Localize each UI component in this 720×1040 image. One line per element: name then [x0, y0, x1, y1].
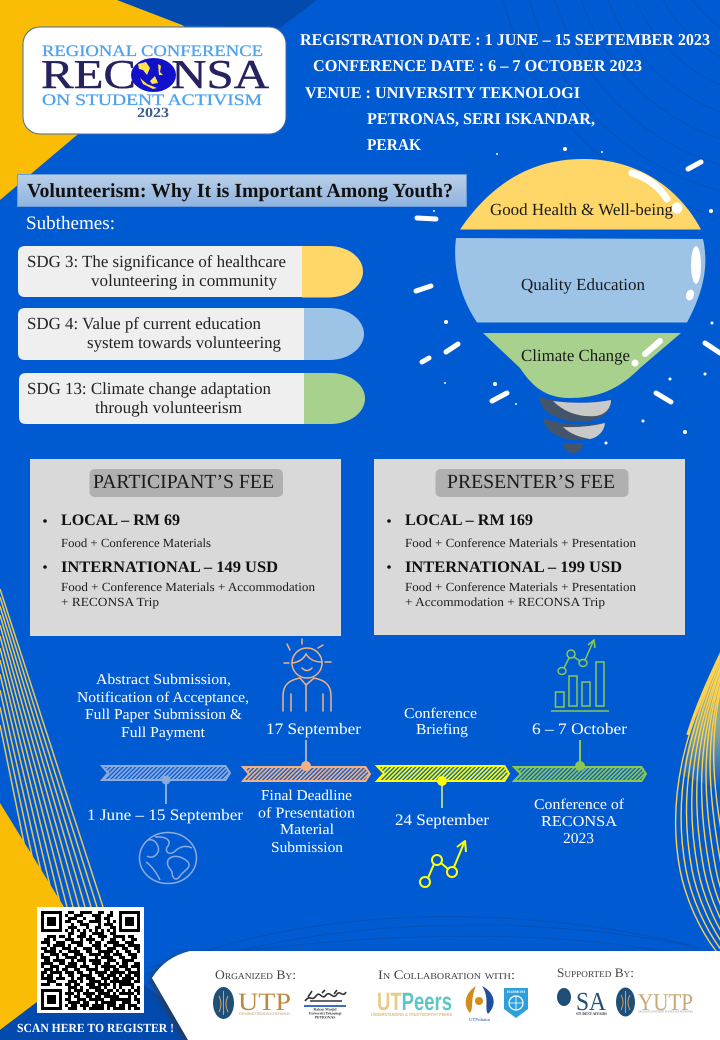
milestone: conference briefing: Briefing: [416, 722, 469, 738]
logo text: reconsa: RECONSA: [41, 51, 269, 97]
organized by: Organized By:: [215, 967, 296, 982]
logo: YUTP: YAYASAN UNIVERSITI TEKNOLOGI PETRONAS: [638, 1010, 693, 1014]
subtheme: SDG 13: [19, 373, 365, 424]
presenter fee heading: PRESENTER’S FEE: [447, 471, 615, 493]
panel: presenter's fee: [374, 459, 685, 635]
participant fee heading: PARTICIPANT’S FEE: [93, 471, 274, 493]
milestone: abstract submission: 1 June – 15 September: [87, 807, 244, 824]
bulb section: good health: [460, 159, 701, 230]
milestone: conference: Conference of: [534, 797, 624, 813]
subtheme: SDG 4: SDG 4: Value pf current education: [27, 314, 261, 333]
milestone: abstract submission: Full Payment: [121, 725, 206, 741]
logo: UTP: UTP: [238, 989, 291, 1016]
logo: YUTP: YUTP: [638, 990, 693, 1016]
logo: Harmoni shield: [504, 988, 528, 1018]
bulb section: climate change: [483, 333, 681, 398]
milestone: presentation material deadline: of Presentation: [258, 806, 356, 822]
bulb section: climate change: Climate Change: [521, 346, 630, 365]
supported by: [557, 965, 693, 1016]
logo card: [23, 27, 286, 134]
subtheme: SDG 3: [18, 246, 363, 298]
main theme banner: [18, 174, 466, 206]
in collaboration with: [371, 967, 528, 1022]
logo: Student Affairs: [557, 987, 608, 1016]
panel: presenter's fee: Food + Conference Materials + Presentation: [405, 536, 637, 550]
logo: Student Affairs: SA: [576, 987, 606, 1016]
logo: UTP: UNIVERSITI TEKNOLOGI PETRONAS: [239, 1011, 290, 1016]
event details: VENUE : UNIVERSITY TEKNOLOGI: [305, 83, 580, 102]
panel: presenter's fee: Food + Conference Materials + Presentation: [405, 580, 637, 594]
panel: presenter's fee: INTERNATIONAL – 199 USD: [405, 559, 622, 576]
bulb section: quality education: [455, 238, 705, 322]
subtheme: SDG 13: SDG 13: Climate change adaptation: [27, 379, 271, 398]
milestone: presentation material deadline: Final Deadline: [261, 788, 352, 804]
logo globe: [131, 58, 176, 92]
subtheme: SDG 3: volunteering in community: [91, 271, 277, 290]
milestone: presentation material deadline: Material: [280, 822, 334, 838]
milestone: conference: 2023: [563, 831, 594, 847]
organized by: [213, 967, 346, 1020]
event details: PERAK: [367, 135, 421, 154]
light bulb: [416, 147, 720, 453]
right gold curves: [682, 652, 720, 790]
logo text: year: 2023: [137, 106, 169, 121]
event details: REGISTRATION DATE : 1 JUNE – 15 SEPTEMBER 2023: [300, 30, 710, 49]
timeline: [77, 639, 646, 887]
milestone: abstract submission: [77, 672, 249, 884]
panel: participant's fee: INTERNATIONAL – 149 USD: [61, 559, 278, 576]
logo: UTPeers: UTPeers: [377, 988, 452, 1016]
in collaboration with: In Collaboration with:: [378, 967, 515, 982]
milestone: conference briefing: [377, 706, 509, 887]
milestone: conference briefing: Conference: [404, 706, 477, 722]
subtheme: SDG 13: through volunteerism: [95, 398, 242, 417]
QR code: [37, 907, 144, 1013]
subthemes heading: Subthemes:: [26, 213, 115, 234]
milestone: presentation material deadline: 17 September: [266, 721, 362, 738]
milestone: abstract submission: Abstract Submission,: [96, 672, 231, 688]
logo: Rakan Masjid: Rakan Masjid: [313, 1008, 337, 1012]
scan caption: SCAN HERE TO REGISTER !: [17, 1021, 174, 1035]
logo: UTPrihatin: [466, 986, 494, 1022]
panel: presenter's fee: + Accommodation + RECONSA Trip: [405, 595, 605, 609]
milestone: presentation material deadline: Submission: [271, 840, 344, 856]
bulb base: [539, 397, 611, 453]
event details: PETRONAS, SERI ISKANDAR,: [367, 109, 595, 128]
left gold stripes: [0, 589, 103, 907]
footer panel: [152, 951, 720, 1040]
panel: presenter's fee: LOCAL – RM 169: [405, 512, 533, 529]
logo: UTP: [213, 987, 291, 1019]
milestone: conference: RECONSA: [541, 814, 617, 830]
logo text: on student activism: ON STUDENT ACTIVISM: [42, 92, 262, 109]
panel: participant's fee: [30, 459, 341, 636]
bulb section: quality education: Quality Education: [521, 275, 645, 294]
icon: yellow nodes arrow: [420, 841, 466, 887]
logo: Rakan Masjid: PETRONAS: [315, 1016, 335, 1020]
bulb section: good health: Good Health & Well-being: [490, 200, 673, 219]
panel: participant's fee: Food + Conference Materials: [61, 536, 211, 550]
logo: YUTP: [616, 988, 693, 1016]
milestone: abstract submission: Full Paper Submission &: [85, 707, 242, 723]
logo text: regional conference: REGIONAL CONFERENCE: [42, 43, 263, 60]
icon: person: [283, 639, 331, 711]
event details: [300, 30, 710, 154]
logo: UTPeers: UNDERSTANDING & TRUSTWORTHY PEERS: [371, 1012, 452, 1017]
logo: Harmoni shield: HARMONI: [507, 990, 525, 994]
milestone: abstract submission: Notification of Acceptance,: [77, 690, 249, 706]
milestone: conference: [514, 640, 646, 847]
sparkles: [416, 147, 720, 444]
supported by: Supported By:: [557, 965, 634, 980]
main theme banner: Volunteerism: Why It is Important Among Youth?: [27, 180, 453, 202]
panel: participant's fee: + RECONSA Trip: [61, 595, 159, 609]
logo: Rakan Masjid: [304, 990, 346, 1020]
subtheme: SDG 3: SDG 3: The significance of healthcare: [27, 252, 286, 271]
panel: participant's fee: Food + Conference Materials + Accommodation: [61, 580, 316, 594]
logo: UTPrihatin: UTPrihatin: [469, 1017, 491, 1022]
presenter fee heading: [436, 469, 628, 497]
logo: Rakan Masjid: Universiti Teknologi: [309, 1012, 341, 1016]
icon: green bar chart: [551, 640, 609, 711]
event details: CONFERENCE DATE : 6 – 7 OCTOBER 2023: [313, 56, 642, 75]
milestone: conference: 6 – 7 October: [532, 721, 628, 738]
milestone: conference briefing: 24 September: [395, 812, 490, 829]
subtheme: SDG 4: [18, 308, 364, 360]
panel: participant's fee: LOCAL – RM 69: [61, 512, 180, 529]
icon: globe: [140, 832, 196, 884]
logo: Student Affairs: STUDENT AFFAIRS: [576, 1011, 608, 1016]
milestone: presentation material deadline: [243, 639, 370, 856]
subtheme: SDG 4: system towards volunteering: [87, 333, 281, 352]
